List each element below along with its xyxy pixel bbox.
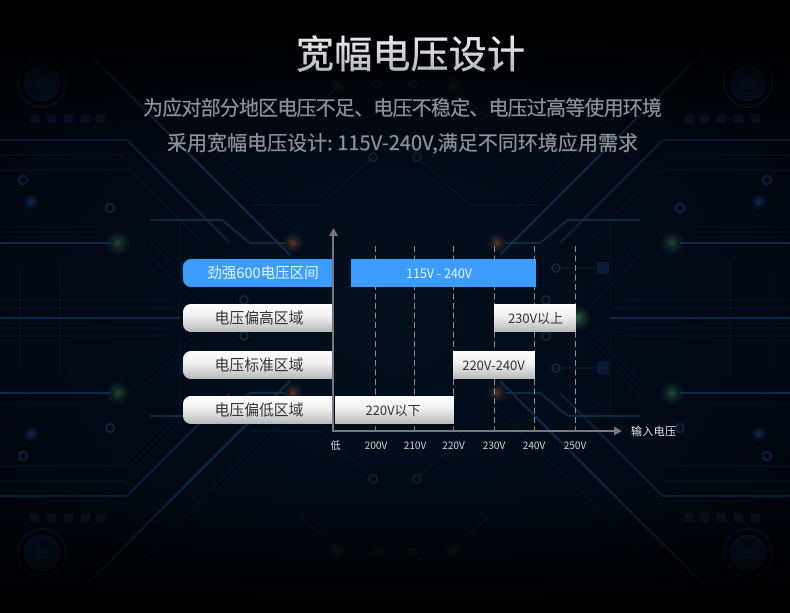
row label: 电压标准区域 <box>183 351 334 379</box>
subtitle line 1: 为应对部分地区电压不足、电压不稳定、电压过高等使用环境 <box>143 92 662 121</box>
title: 宽幅电压设计 <box>296 24 525 79</box>
chart: voltage ranges <box>183 228 676 452</box>
x axis tick labels: 240V <box>523 437 545 452</box>
bar: 230V以上: 230V以上 <box>508 308 563 327</box>
x axis tick labels <box>330 437 586 452</box>
bar: 115V - 240V: 115V - 240V <box>406 263 473 282</box>
x axis tick labels: 210V <box>404 437 426 452</box>
bar: 230V以上 <box>494 304 576 332</box>
x axis tick labels: 250V <box>564 437 586 452</box>
bar: 220V以下 <box>335 396 454 424</box>
x axis tick labels: 低 <box>330 437 340 452</box>
row label: 劲强600电压区间 <box>183 259 334 287</box>
row label: 电压偏高区域: 电压偏高区域 <box>215 307 304 328</box>
row label: 电压标准区域: 电压标准区域 <box>215 354 304 375</box>
row label: 电压偏低区域 <box>183 396 334 424</box>
axes with arrows <box>329 228 622 436</box>
bar: 220V以下: 220V以下 <box>365 400 421 419</box>
x axis tick labels: 220V <box>442 437 465 452</box>
row label: 电压偏高区域 <box>183 304 334 332</box>
bar: 220V-240V <box>453 351 535 379</box>
subtitle line 2: 采用宽幅电压设计: 115V-240V,满足不同环境应用需求 <box>167 127 638 156</box>
x axis tick labels: 230V <box>483 437 505 452</box>
x axis title: 输入电压 <box>631 423 676 439</box>
row label: 劲强600电压区间: 劲强600电压区间 <box>207 262 319 283</box>
bar: 220V-240V: 220V-240V <box>462 355 525 374</box>
x axis tick labels: 200V <box>365 437 387 452</box>
dashed gridlines <box>376 246 576 431</box>
row label: 电压偏低区域: 电压偏低区域 <box>215 399 304 420</box>
bar: 115V - 240V <box>351 259 536 287</box>
